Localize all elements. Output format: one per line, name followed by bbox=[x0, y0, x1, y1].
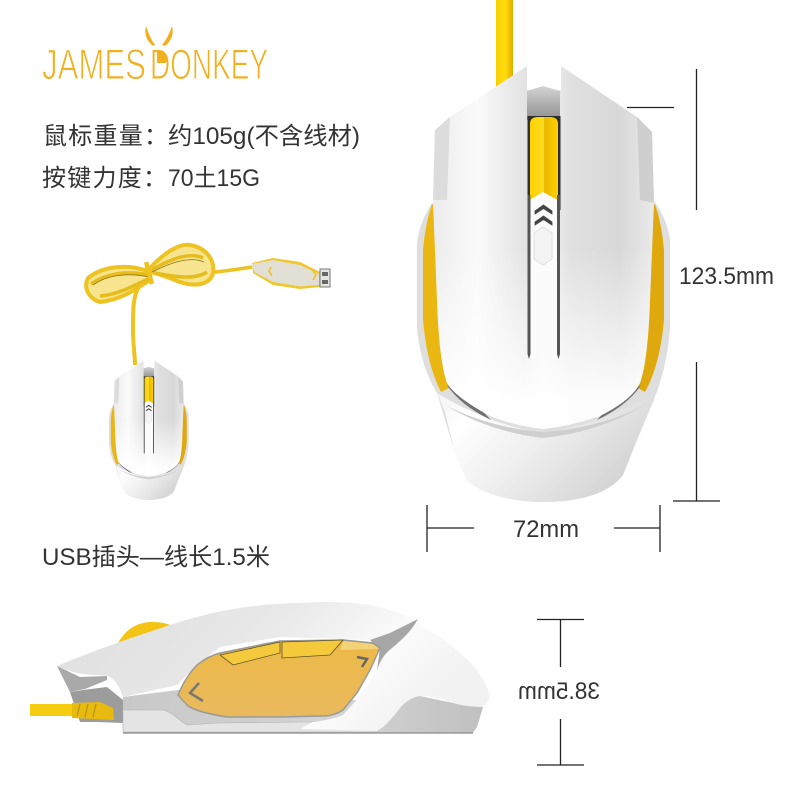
logo: James Donkey: DONKEY bbox=[150, 41, 268, 89]
lower body bbox=[123, 690, 483, 733]
base shadow line bbox=[123, 732, 473, 734]
upper right light strip bbox=[340, 641, 379, 650]
side button panel bbox=[178, 640, 380, 717]
spec text: key force bbox=[42, 165, 260, 192]
shell bbox=[57, 602, 490, 731]
dimension: length 123.5mm bbox=[627, 69, 774, 501]
side buttons bbox=[220, 640, 343, 665]
dimension: width 72mm bbox=[427, 505, 660, 552]
mouse cable, top view bbox=[496, 0, 513, 90]
dimension: height 38.5mm, mirrored: 38.5mm bbox=[518, 678, 600, 705]
cable bbox=[30, 704, 74, 716]
mouse side view bbox=[30, 602, 490, 733]
scroll wheel bbox=[118, 622, 172, 643]
spec text: weight: 鼠标重量： bbox=[43, 123, 168, 150]
spec text: weight: 约105g(不含线材) bbox=[168, 123, 360, 150]
coiled cable and USB plug bbox=[86, 245, 330, 365]
rear panel and lower strip bbox=[123, 710, 385, 732]
spec text: key force: 按键力度： bbox=[42, 165, 167, 192]
dimension: length 123.5mm: 123.5mm bbox=[679, 263, 774, 290]
mouse small top view bbox=[109, 360, 189, 500]
spec text: key force: 70土15G bbox=[168, 165, 260, 192]
front silver accent bbox=[370, 619, 418, 670]
logo: James Donkey: JAMES bbox=[42, 41, 146, 89]
rear facet and interior bbox=[57, 666, 107, 692]
side arrows bbox=[190, 683, 203, 701]
dimension: height 38.5mm, mirrored bbox=[518, 620, 600, 765]
caption: USB plug and cable length: USB插头—线长1.5米 bbox=[42, 544, 270, 571]
logo: James Donkey bbox=[42, 26, 268, 89]
spec text: weight bbox=[43, 123, 360, 150]
mouse top view bbox=[417, 66, 670, 502]
dimension: width 72mm: 72mm bbox=[513, 516, 579, 543]
